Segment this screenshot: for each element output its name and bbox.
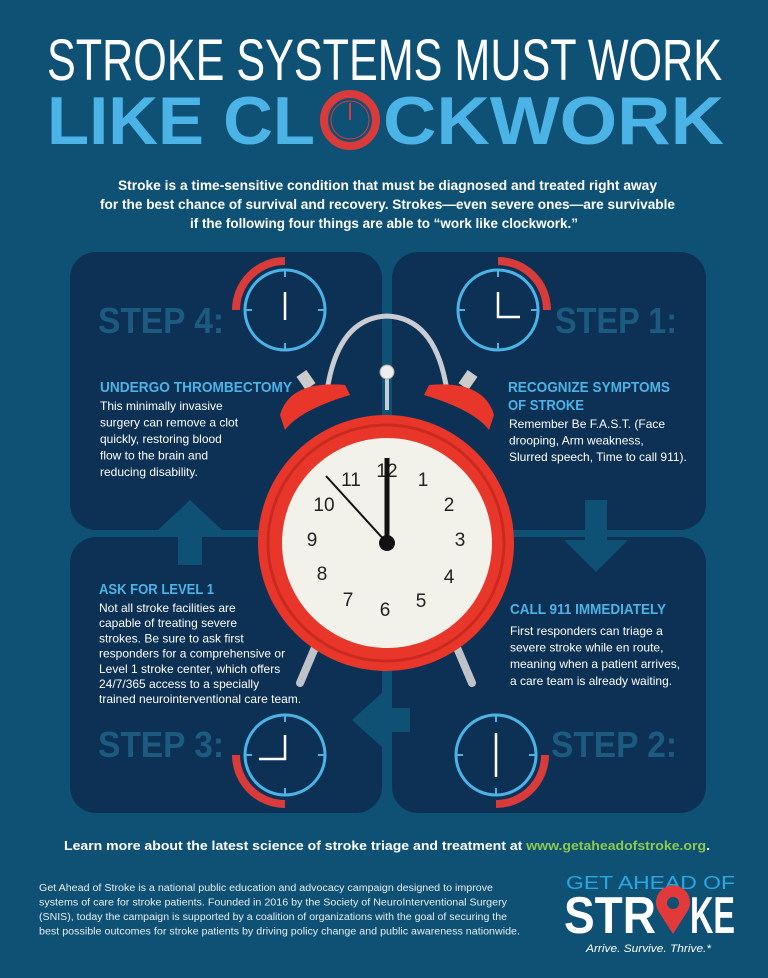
footer description: (SNIS), today the campaign is supported by a coalition of organizations with the goal of securing the <box>39 912 507 923</box>
intro text: for the best chance of survival and recovery. Strokes—even severe ones—are survivable <box>100 197 675 212</box>
logo: KE <box>690 887 735 945</box>
step labels: STEP 1: <box>555 300 677 341</box>
icon: step 4 clock <box>236 261 325 350</box>
step 2 text <box>510 601 680 688</box>
step 3 text: trained neurointerventional care team. <box>99 692 301 706</box>
step 4 text: quickly, restoring blood <box>100 432 222 446</box>
arrow: up to step 4 <box>158 500 222 565</box>
step 4 text: This minimally invasive <box>100 399 223 413</box>
learn more line: Learn more about the latest science of stroke triage and treatment at www.getaheadofstroke.org . <box>64 838 710 853</box>
step 1 text: OF STROKE <box>508 397 584 414</box>
panel: step 2 <box>392 537 706 813</box>
step 3 text: capable of treating severe <box>99 616 237 630</box>
step 4 text: flow to the brain and <box>100 448 208 462</box>
step labels <box>98 300 677 765</box>
intro text <box>100 178 675 231</box>
arrow: down to step 2 <box>564 500 628 572</box>
step labels: STEP 2: <box>551 724 677 765</box>
logo: Arrive. Survive. Thrive.* <box>585 943 712 955</box>
alarm clock: 9 <box>307 530 317 551</box>
subtitle: like clockwork <box>47 83 724 159</box>
icon: title clock O <box>324 94 376 146</box>
icon: map pin <box>656 885 690 934</box>
step 3 text: Not all stroke facilities are <box>99 601 236 615</box>
alarm clock: 8 <box>317 564 327 585</box>
footer description: systems of care for stroke patients. Founded in 2016 by the Society of NeuroInterventional Surgery <box>39 898 507 908</box>
arrow: left to step 3 <box>352 690 410 750</box>
icon: step 1 clock <box>458 261 547 350</box>
logo <box>564 873 735 955</box>
step 2 text: severe stroke while en route, <box>510 641 663 655</box>
step 3 text: Level 1 stroke center, which offers <box>99 662 280 676</box>
alarm clock: 3 <box>455 530 465 551</box>
icon: step 3 clock <box>236 715 325 804</box>
intro text: Stroke is a time-sensitive condition that must be diagnosed and treated right away <box>118 178 657 193</box>
step 1 text: Slurred speech, Time to call 911). <box>509 450 687 464</box>
step 3 text: 24/7/365 access to a specially <box>99 677 259 691</box>
icon: step 2 clock <box>456 715 545 804</box>
step 3 text: strokes. Be sure to ask first <box>99 631 244 645</box>
step 2 text: meaning when a patient arrives, <box>510 657 680 671</box>
logo: GET AHEAD OF <box>566 873 735 893</box>
step 4 text: surgery can remove a clot <box>100 416 239 430</box>
footer description: Get Ahead of Stroke is a national public education and advocacy campaign designed to improve <box>39 883 493 894</box>
alarm clock: 10 <box>313 495 335 516</box>
step 4 text: UNDERGO THROMBECTOMY <box>100 379 292 396</box>
panel: step 1 <box>392 252 706 530</box>
panel: step 3 <box>70 537 382 813</box>
step 1 text: RECOGNIZE SYMPTOMS <box>508 379 670 396</box>
subtitle: like clockwork: CKWORK <box>383 83 724 159</box>
alarm clock: 12 <box>376 461 398 482</box>
footer description <box>39 883 520 938</box>
step 4 text: reducing disability. <box>100 465 198 479</box>
step 2 text: a care team is already waiting. <box>510 674 672 688</box>
alarm clock: 5 <box>416 591 426 612</box>
intro text: if the following four things are able to “work like clockwork.” <box>190 216 578 231</box>
step 1 text: drooping, Arm weakness, <box>509 434 644 448</box>
footer description: best possible outcomes for stroke patients by driving policy change and public awareness nationwide. <box>39 926 520 938</box>
logo: STR <box>564 887 656 945</box>
subtitle: like clockwork: LIKE CL <box>47 83 315 159</box>
step labels: STEP 3: <box>98 724 224 765</box>
step 2 text: First responders can triage a <box>510 624 663 638</box>
step 3 text: responders for a comprehensive or <box>99 647 285 661</box>
alarm clock: 6 <box>380 600 390 621</box>
step labels: STEP 4: <box>98 300 224 341</box>
step 3 text: ASK FOR LEVEL 1 <box>99 581 214 598</box>
panel: step 4 <box>70 252 382 530</box>
alarm clock: 7 <box>343 590 353 611</box>
alarm clock: 4 <box>444 567 455 588</box>
alarm clock: 11 <box>341 470 361 491</box>
alarm clock: 2 <box>444 495 454 516</box>
step 3 text <box>99 581 301 706</box>
alarm clock: 1 <box>418 470 428 491</box>
step 2 text: CALL 911 IMMEDIATELY <box>510 601 666 618</box>
step 1 text <box>508 379 687 464</box>
step 4 text <box>100 379 292 479</box>
step 1 text: Remember Be F.A.S.T. (Face <box>509 417 665 431</box>
alarm clock <box>258 316 514 683</box>
